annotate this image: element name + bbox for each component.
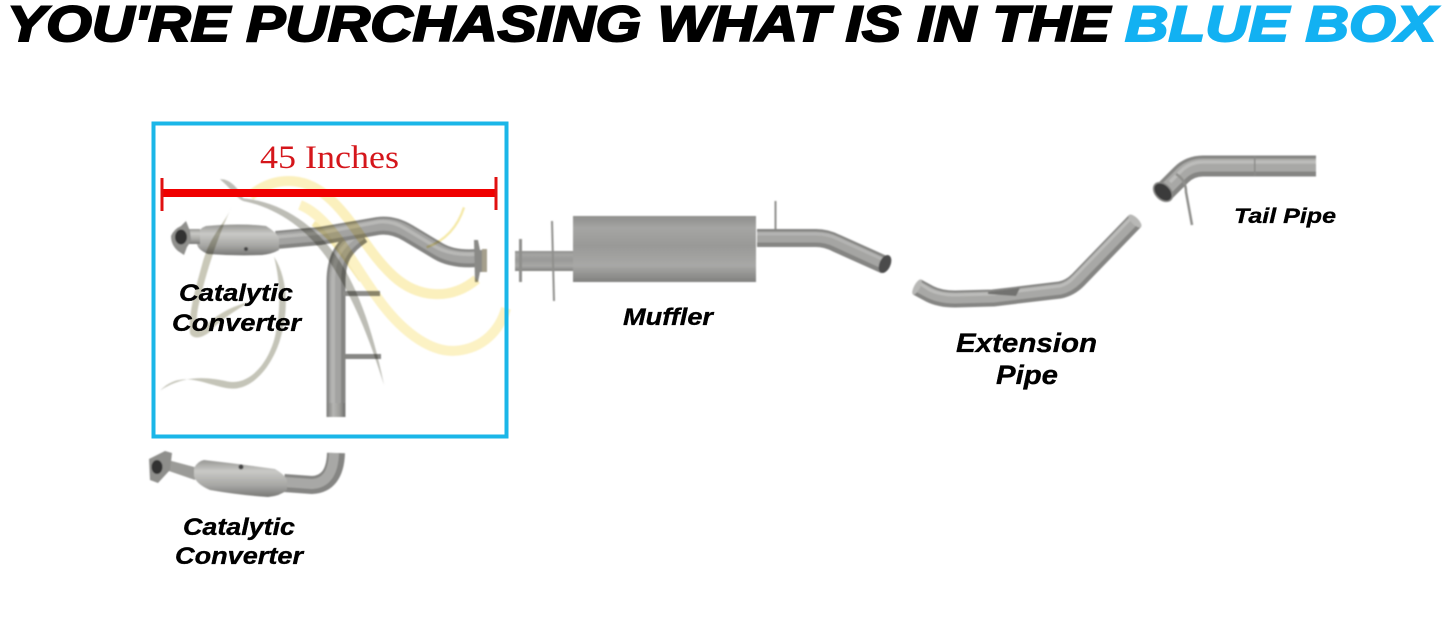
dimension: 45 inches: 45 Inches xyxy=(260,140,399,176)
flanges xyxy=(519,221,555,301)
sensor xyxy=(238,464,244,470)
title xyxy=(7,0,1439,52)
label: catalytic converter in box xyxy=(172,280,303,337)
extension pipe xyxy=(910,213,1143,299)
label: extension pipe: Extension xyxy=(956,328,1097,358)
outlet bend xyxy=(284,453,336,485)
outlet flange xyxy=(474,240,487,282)
label: muffler: Muffler xyxy=(623,304,715,331)
dimension: 45 inches xyxy=(160,140,498,211)
label: lower catalytic converter xyxy=(175,514,305,570)
lower catalytic converter xyxy=(149,451,336,497)
inlet neck xyxy=(186,229,200,244)
label: lower catalytic converter: Catalytic xyxy=(183,514,295,541)
outlet hanger xyxy=(774,201,776,231)
inlet flange xyxy=(149,451,172,483)
label: tail pipe: Tail Pipe xyxy=(1234,205,1336,228)
label: extension pipe xyxy=(956,328,1097,390)
muffler body xyxy=(573,216,756,282)
label: extension pipe: Pipe xyxy=(996,360,1058,390)
label: catalytic converter in box: Converter xyxy=(172,310,303,337)
inlet flange xyxy=(171,221,191,255)
watermark: horse and yellow streams xyxy=(160,179,506,391)
converter body xyxy=(194,460,287,497)
inlet pipe xyxy=(515,251,575,271)
label: lower catalytic converter: Converter xyxy=(175,543,305,570)
inlet neck xyxy=(166,460,198,480)
main Y pipe xyxy=(276,222,478,258)
muffler xyxy=(515,201,894,301)
outlet pipe xyxy=(757,234,894,275)
vertical downpipe xyxy=(327,234,381,417)
tail pipe xyxy=(1150,156,1316,225)
pipe assembly with catalytic converter xyxy=(171,221,487,417)
label: catalytic converter in box: Catalytic xyxy=(179,280,293,307)
catalytic body xyxy=(197,224,279,255)
panel: blue box xyxy=(154,124,506,436)
